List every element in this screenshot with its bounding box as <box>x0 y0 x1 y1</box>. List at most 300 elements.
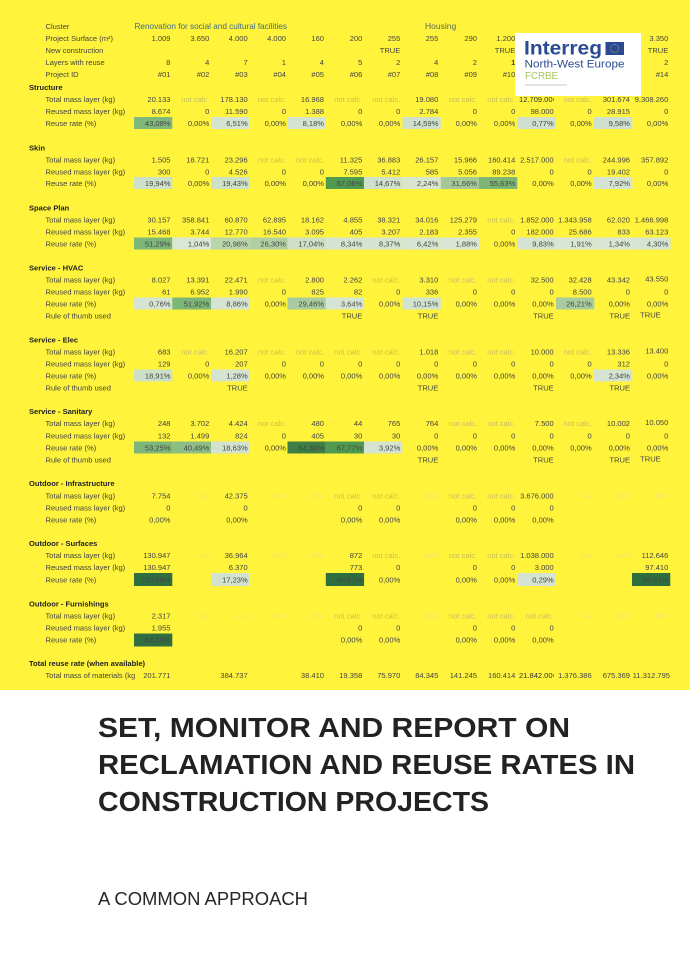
project ID row: #06 <box>350 70 362 79</box>
reuse rate row: Reuse rate (%) <box>46 372 97 380</box>
reuse rate row: 0,00% <box>494 119 516 128</box>
project ID row: #09 <box>464 70 477 79</box>
reuse rate row: 0,00% <box>303 372 324 380</box>
reused mass row: 0 <box>664 107 668 116</box>
total mass row: N/A <box>197 492 210 500</box>
project surface row: 1.200 <box>496 34 515 43</box>
reuse rate row: 0,00% <box>456 636 477 644</box>
reuse rate row: 0,00% <box>341 372 363 380</box>
reuse rate row: 8,18% <box>303 119 324 128</box>
total mass row: 18.721 <box>186 156 209 164</box>
total mass row: not calc. <box>334 348 362 356</box>
logo: Interreg North-West Europe FCRBE: Interreg <box>524 38 602 60</box>
total mass row: 44 <box>354 419 362 428</box>
total mass of materials row: 160.414 <box>488 671 515 680</box>
reused mass row: 30 <box>354 432 362 440</box>
layers with reuse row: Layers with reuse <box>46 58 105 67</box>
reuse rate row: 0,00% <box>265 119 286 128</box>
reused mass row: 0 <box>282 168 286 176</box>
reused mass row: 28.915 <box>607 107 630 116</box>
reuse rate row: 0,00% <box>647 444 669 452</box>
total mass row: not calc. <box>449 419 477 428</box>
total mass row: 3.310 <box>419 276 438 284</box>
total mass row: 2.317 <box>152 612 170 620</box>
reused mass row: 0 <box>473 624 477 632</box>
reused mass row: 129 <box>158 360 170 368</box>
total mass row <box>46 156 668 164</box>
reused mass row: 0 <box>473 563 477 572</box>
reused mass row: 61 <box>162 288 170 296</box>
project surface row: 3.650 <box>190 34 209 43</box>
reused mass row: 0 <box>205 107 209 116</box>
reused mass row <box>46 107 668 116</box>
total mass row: not calc. <box>564 95 592 104</box>
reused mass row: 0 <box>587 168 592 176</box>
total mass row: not calc. <box>372 612 400 620</box>
reuse rate row: 0,00% <box>532 444 554 452</box>
reuse rate row <box>46 573 670 586</box>
reused mass row: 0 <box>358 504 362 512</box>
reuse rate row: 0,00% <box>379 516 401 524</box>
project ID row: #01 <box>158 70 170 79</box>
reuse rate row: 100,00% <box>141 576 171 584</box>
total mass row: Total mass layer (kg) <box>46 612 116 620</box>
reused mass row: 0 <box>473 288 477 296</box>
total mass row: 42.375 <box>225 492 248 500</box>
total mass row: not calc. <box>564 419 592 428</box>
total mass row: 20.133 <box>147 95 170 104</box>
project surface row: 4.000 <box>229 34 248 43</box>
reused mass row: Reused mass layer (kg) <box>46 228 126 236</box>
reused mass row: 0 <box>473 107 477 116</box>
section: Service - Elec <box>29 336 669 392</box>
reuse rate row <box>46 177 669 189</box>
reuse rate row: 0,00% <box>456 576 477 584</box>
total mass row: Total mass layer (kg) <box>46 95 116 104</box>
data table <box>29 21 670 680</box>
reuse rate row: 55,63% <box>490 179 516 188</box>
project surface row: 255 <box>426 34 438 43</box>
total mass row: 12.709.000 <box>519 95 557 104</box>
total mass row: N/A <box>579 612 593 620</box>
total mass row: not calc. <box>487 348 515 356</box>
reused mass row: 0 <box>205 168 209 176</box>
title: RECLAMATION AND REUSE RATES IN <box>98 749 635 780</box>
reused mass row: 8.674 <box>152 107 170 116</box>
reuse rate row: 10,15% <box>413 300 439 308</box>
reused mass row: 0 <box>243 504 248 512</box>
reuse rate row: 0,00% <box>341 516 363 524</box>
reused mass row: 300 <box>158 168 170 176</box>
reused mass row: 0 <box>358 107 362 116</box>
reused mass row: 0 <box>358 624 362 632</box>
reuse rate row: 0,00% <box>265 300 286 308</box>
rule of thumb row: TRUE <box>533 384 554 392</box>
reused mass row: 0 <box>511 228 515 236</box>
layers with reuse row: 2 <box>396 58 400 67</box>
reused mass row: 0 <box>549 432 554 440</box>
total mass row: N/A <box>617 551 631 560</box>
reused mass row: Reused mass layer (kg) <box>46 288 126 296</box>
rule of thumb row: TRUE <box>533 456 554 464</box>
reused mass row: 5.056 <box>458 168 477 176</box>
reused mass row: 405 <box>311 432 324 440</box>
total mass row: not calc. <box>258 95 286 104</box>
project ID row: Project ID <box>46 70 79 79</box>
reuse rate row: 0,00% <box>532 636 554 644</box>
reused mass row: 8.500 <box>573 288 592 296</box>
rule of thumb row: Rule of thumb used <box>46 312 111 320</box>
project surface row: 290 <box>464 34 477 43</box>
total mass row: 3.702 <box>190 419 209 428</box>
reuse rate row: 0,00% <box>379 636 401 644</box>
layers with reuse row: 4 <box>434 58 438 67</box>
total mass row: not calc. <box>334 95 362 104</box>
section: Service - HVAC <box>29 264 669 320</box>
reuse rate row: 1,28% <box>226 372 248 380</box>
reuse rate row: 0,00% <box>456 516 477 524</box>
total mass of materials row: 38.410 <box>301 671 324 680</box>
reused mass row: 11.590 <box>225 107 248 116</box>
table header: project attributes <box>46 21 668 79</box>
total mass row: N/A <box>235 612 249 620</box>
total mass row: not calc. <box>487 419 515 428</box>
icon: EU flag <box>606 42 624 55</box>
reuse rate row: 0,00% <box>417 444 439 452</box>
reused mass row: Reused mass layer (kg) <box>46 360 126 368</box>
total mass row: 16.968 <box>301 95 324 104</box>
project ID row: #03 <box>235 70 248 79</box>
total mass row: 62.895 <box>263 216 286 224</box>
reuse rate row <box>46 516 554 524</box>
section: Outdoor - Infrastructure <box>29 479 669 524</box>
total mass row: 130.947 <box>143 551 170 560</box>
total mass row: 38.321 <box>377 216 400 224</box>
reuse rate row: 0,00% <box>570 179 592 188</box>
logo: Interreg North-West Europe FCRBE: North-West Europe <box>524 58 624 70</box>
reused mass row <box>46 563 668 572</box>
reuse rate row: 8,37% <box>379 240 401 248</box>
layers with reuse row: 1 <box>282 58 286 67</box>
reused mass row: 5.412 <box>381 168 400 176</box>
total mass row <box>46 346 668 356</box>
reuse rate row: 0,00% <box>379 300 401 308</box>
reused mass row: 2.784 <box>419 107 438 116</box>
reuse rate row: 53,25% <box>145 444 171 452</box>
total mass row: not calc. <box>449 492 477 500</box>
reused mass row: 0 <box>511 360 515 368</box>
heading: Outdoor - Infrastructure: Outdoor - Infrastructure <box>29 479 115 488</box>
reuse rate row: 0,00% <box>149 516 171 524</box>
total mass row <box>46 96 668 104</box>
section: Outdoor - Surfaces <box>29 539 670 586</box>
total mass row <box>46 612 669 620</box>
reused mass row: 3.207 <box>381 228 400 236</box>
total mass of materials row <box>46 672 670 680</box>
reuse rate row: 8,34% <box>341 240 363 248</box>
reused mass row: 30 <box>392 432 400 440</box>
total mass row: not calc. <box>487 492 515 500</box>
reused mass row: 405 <box>350 228 362 236</box>
total mass row: N/A <box>426 612 439 620</box>
reuse rate row: 0,00% <box>303 179 324 188</box>
total mass row: 36.883 <box>377 156 400 164</box>
reuse rate row: Reuse rate (%) <box>46 119 97 128</box>
reuse rate row: 0,00% <box>494 636 516 644</box>
heading: Service - Elec: Service - Elec <box>29 336 78 344</box>
reused mass row: 182.000 <box>526 228 554 236</box>
reused mass row: Reused mass layer (kg) <box>46 624 126 632</box>
rule of thumb row: Rule of thumb used <box>46 384 111 392</box>
total mass row: 1.505 <box>152 156 170 164</box>
total mass row: Total mass layer (kg) <box>46 492 116 500</box>
total mass row: 36.964 <box>225 551 248 560</box>
reused mass row: 0 <box>511 563 515 572</box>
project ID row <box>46 70 668 79</box>
reused mass row: 0 <box>396 563 400 572</box>
heading: Space Plan: Space Plan <box>29 204 70 212</box>
reused mass row <box>46 228 668 236</box>
reused mass row: 0 <box>166 504 170 512</box>
total mass row: N/A <box>311 551 325 560</box>
reused mass row: 19.402 <box>607 168 630 176</box>
reused mass row: 25.686 <box>569 228 592 236</box>
reused mass row: 16.540 <box>263 228 286 236</box>
reuse rate row: 0,77% <box>532 119 554 128</box>
reuse rate row: Reuse rate (%) <box>46 516 97 524</box>
reused mass row: 0 <box>511 432 515 440</box>
total mass row: 13.391 <box>186 276 209 284</box>
total mass row: 248 <box>158 419 170 428</box>
reuse rate row: 26,21% <box>566 300 592 308</box>
total mass of materials row: 11.312.795 <box>633 671 670 680</box>
total mass row: 301.674 <box>603 95 630 104</box>
reused mass row: 207 <box>235 360 248 368</box>
total mass row: not calc. <box>449 276 477 284</box>
reuse rate row: 0,00% <box>188 179 210 188</box>
reused mass row: 0 <box>626 288 630 296</box>
new construction row <box>46 46 668 55</box>
reused mass row: 3.095 <box>305 228 324 236</box>
reused mass row: 0 <box>396 360 400 368</box>
total mass row: not calc. <box>487 216 515 224</box>
total mass row: Total mass layer (kg) <box>46 419 116 428</box>
total mass row: 43.342 <box>607 276 630 284</box>
reused mass row: Reused mass layer (kg) <box>46 563 126 572</box>
reuse rate row: 0,00% <box>532 372 554 380</box>
rule of thumb row: Rule of thumb used <box>46 456 111 464</box>
reused mass row: 15.468 <box>147 228 170 236</box>
reused mass row: 3.000 <box>535 563 554 572</box>
reuse rate row: 18,91% <box>145 372 171 380</box>
total mass row: 357.892 <box>641 156 668 164</box>
reuse rate row: 51,92% <box>184 300 210 308</box>
rule of thumb row: TRUE <box>533 312 554 320</box>
total mass row: 2.517.000 <box>520 156 554 164</box>
total mass row: not calc. <box>449 95 477 104</box>
total mass row: 125.279 <box>450 216 477 224</box>
reused mass row: 6.952 <box>190 288 209 296</box>
reuse rate row: 1,91% <box>570 240 592 248</box>
reuse rate row: 0,00% <box>570 444 592 452</box>
total mass row: not calc. <box>372 348 400 356</box>
total mass row: 765 <box>388 419 400 428</box>
reused mass row: 0 <box>664 360 668 368</box>
total mass row: 11.325 <box>340 156 362 164</box>
reused mass row: 7.595 <box>343 168 362 176</box>
layers with reuse row: 7 <box>243 58 248 67</box>
reused mass row: 6.370 <box>229 563 248 572</box>
reused mass row: 97.410 <box>645 563 668 572</box>
reuse rate row: 0,00% <box>265 372 286 380</box>
total mass row: not calc. <box>372 276 400 284</box>
reuse rate row: 0,00% <box>609 444 630 452</box>
reused mass row <box>46 432 668 440</box>
total mass row: 43.550 <box>645 274 668 284</box>
title: CONSTRUCTION PROJECTS <box>98 786 489 817</box>
reused mass row: 0 <box>473 360 477 368</box>
total mass row: 15.966 <box>454 156 477 164</box>
total mass row: 1.038.000 <box>520 551 554 560</box>
reused mass row: 0 <box>549 288 554 296</box>
total mass of materials row: 19.358 <box>339 671 362 680</box>
reuse rate row: 0,00% <box>494 576 516 584</box>
reused mass row: 130.947 <box>143 563 170 572</box>
layers with reuse row: 5 <box>358 58 362 67</box>
reused mass row <box>46 624 554 632</box>
reuse rate row: 67,77% <box>337 444 363 452</box>
total mass row: N/A <box>656 492 669 500</box>
total mass row: not calc. <box>258 419 286 428</box>
total mass row: N/A <box>311 492 325 500</box>
reused mass row: 0 <box>511 107 515 116</box>
reused mass row: 0 <box>473 504 477 512</box>
reuse rate row: 3,92% <box>379 444 401 452</box>
total mass row: 18.162 <box>301 216 324 224</box>
reused mass row: 0 <box>282 432 286 440</box>
reused mass row: 0 <box>549 168 554 176</box>
total mass row: not calc. <box>449 348 477 356</box>
new construction row: TRUE <box>380 46 400 55</box>
reuse rate row: 0,00% <box>532 516 554 524</box>
reused mass row <box>46 288 668 296</box>
cluster row <box>46 21 456 31</box>
reuse rate row: 0,00% <box>456 119 477 128</box>
total mass row: 480 <box>311 419 324 428</box>
total mass row: not calc. <box>449 612 477 620</box>
reuse rate row: 0,00% <box>341 636 363 644</box>
reused mass row: 1.990 <box>229 288 248 296</box>
total mass row: 4.855 <box>343 216 362 224</box>
total mass row: 30.157 <box>147 216 170 224</box>
reuse rate row: 0,00% <box>188 119 210 128</box>
project ID row: #07 <box>388 70 400 79</box>
total mass row: 1.466.998 <box>635 216 668 224</box>
total mass row: 764 <box>426 419 438 428</box>
total mass row: 16.207 <box>225 348 248 356</box>
reuse rate row: 40,49% <box>184 444 210 452</box>
total mass row: not calc. <box>487 276 515 284</box>
reused mass row: 0 <box>587 107 592 116</box>
total mass row: Total mass layer (kg) <box>46 216 116 224</box>
total mass row <box>46 418 668 428</box>
project ID row: #02 <box>197 70 209 79</box>
rule of thumb row <box>46 454 661 464</box>
reuse rate row: 0,00% <box>494 372 516 380</box>
reuse rate row: 0,00% <box>647 372 669 380</box>
reuse rate row: 0,76% <box>149 300 171 308</box>
reused mass row: 0 <box>320 168 324 176</box>
total mass row: 60.870 <box>225 216 248 224</box>
rule of thumb row: TRUE <box>227 384 248 392</box>
reuse rate row: 0,00% <box>494 300 516 308</box>
total mass row: N/A <box>197 551 210 560</box>
reused mass row: Reused mass layer (kg) <box>46 432 126 440</box>
rule of thumb row: TRUE <box>418 456 438 464</box>
reused mass row: 0 <box>549 504 554 512</box>
total mass of materials row: 201.771 <box>143 671 170 680</box>
total mass of materials row: 675.369 <box>603 671 630 680</box>
logo: Interreg North-West Europe FCRBE <box>515 33 641 96</box>
total mass row: 244.996 <box>603 156 630 164</box>
new construction row: TRUE <box>648 46 668 55</box>
reuse rate row: 19,43% <box>222 179 248 188</box>
total mass row: 23.296 <box>225 156 248 164</box>
layers with reuse row: 2 <box>664 58 668 67</box>
reuse rate row: 2,24% <box>417 179 439 188</box>
panel: yellow data table background <box>0 0 690 690</box>
total mass row: 2.800 <box>305 276 324 284</box>
layers with reuse row <box>46 58 668 67</box>
reuse rate row: Reuse rate (%) <box>46 179 97 188</box>
reuse rate row: Reuse rate (%) <box>46 636 97 644</box>
total mass row: 10.050 <box>645 418 668 427</box>
total mass row: Total mass layer (kg) <box>46 156 116 164</box>
total mass row: N/A <box>311 612 325 620</box>
total mass row: 1.343.958 <box>558 216 592 224</box>
reuse rate row: 29,46% <box>298 300 324 308</box>
reused mass row: 312 <box>617 360 630 368</box>
project surface row: 3.350 <box>649 34 668 43</box>
reused mass row: 0 <box>587 360 592 368</box>
reuse rate row: 0,00% <box>494 240 516 248</box>
reuse rate row: 0,00% <box>647 119 669 128</box>
reused mass row: 0 <box>396 107 400 116</box>
reused mass row: 773 <box>350 563 362 572</box>
reuse rate row: Reuse rate (%) <box>46 240 97 248</box>
reused mass row: 0 <box>282 360 286 368</box>
project surface row: Project Surface (m²) <box>46 34 114 43</box>
reuse rate row: 0,00% <box>609 300 630 308</box>
total mass row: not calc. <box>372 492 400 500</box>
reuse rate row: 14,67% <box>375 179 401 188</box>
reused mass row: 0 <box>282 288 286 296</box>
total mass row: N/A <box>197 612 210 620</box>
total mass row: not calc. <box>258 348 286 356</box>
reuse rate row: 9,58% <box>609 119 630 128</box>
reused mass row <box>46 360 668 368</box>
total mass row: 8.027 <box>152 276 170 284</box>
project surface row <box>46 34 668 43</box>
reuse rate row: 0,00% <box>570 119 592 128</box>
reused mass row: 82 <box>354 288 362 296</box>
total mass row: not calc. <box>564 156 592 164</box>
layers with reuse row: 2 <box>473 58 477 67</box>
total mass row: not calc. <box>258 276 286 284</box>
title: SET, MONITOR AND REPORT ON <box>98 712 570 743</box>
reused mass row: 1.955 <box>152 624 170 632</box>
reuse rate row: 31,66% <box>451 179 477 188</box>
